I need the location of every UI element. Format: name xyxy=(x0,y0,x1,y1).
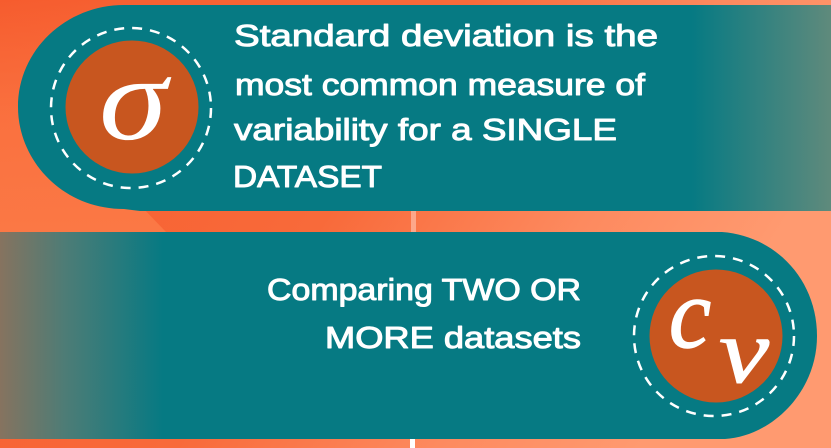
panel fade left xyxy=(0,232,163,439)
vertical divider top xyxy=(411,211,416,232)
icon: sigma badge: σ xyxy=(99,32,171,165)
text block: standard deviation xyxy=(233,18,658,194)
icon: cv badge xyxy=(634,256,794,416)
text block: standard deviation: variability for a SINGLE xyxy=(234,112,617,147)
text block: standard deviation: Standard deviation is the xyxy=(234,18,658,53)
icon: cv badge: c xyxy=(669,258,711,369)
panel background xyxy=(0,232,817,439)
text block: comparing: Comparing TWO OR xyxy=(267,272,581,307)
text block: standard deviation: DATASET xyxy=(233,159,382,194)
text block: comparing: MORE datasets xyxy=(325,320,581,355)
panel background xyxy=(18,5,831,211)
panel fade right xyxy=(640,5,831,211)
panel: standard deviation xyxy=(18,5,831,211)
icon: cv badge: v xyxy=(719,300,769,402)
text block: standard deviation: most common measure of xyxy=(235,67,645,102)
icon: sigma badge xyxy=(51,28,211,188)
panel: coefficient of variation xyxy=(0,232,817,439)
vertical divider bottom xyxy=(410,439,415,448)
light shape lower left xyxy=(0,0,166,232)
text block: comparing xyxy=(267,272,581,355)
